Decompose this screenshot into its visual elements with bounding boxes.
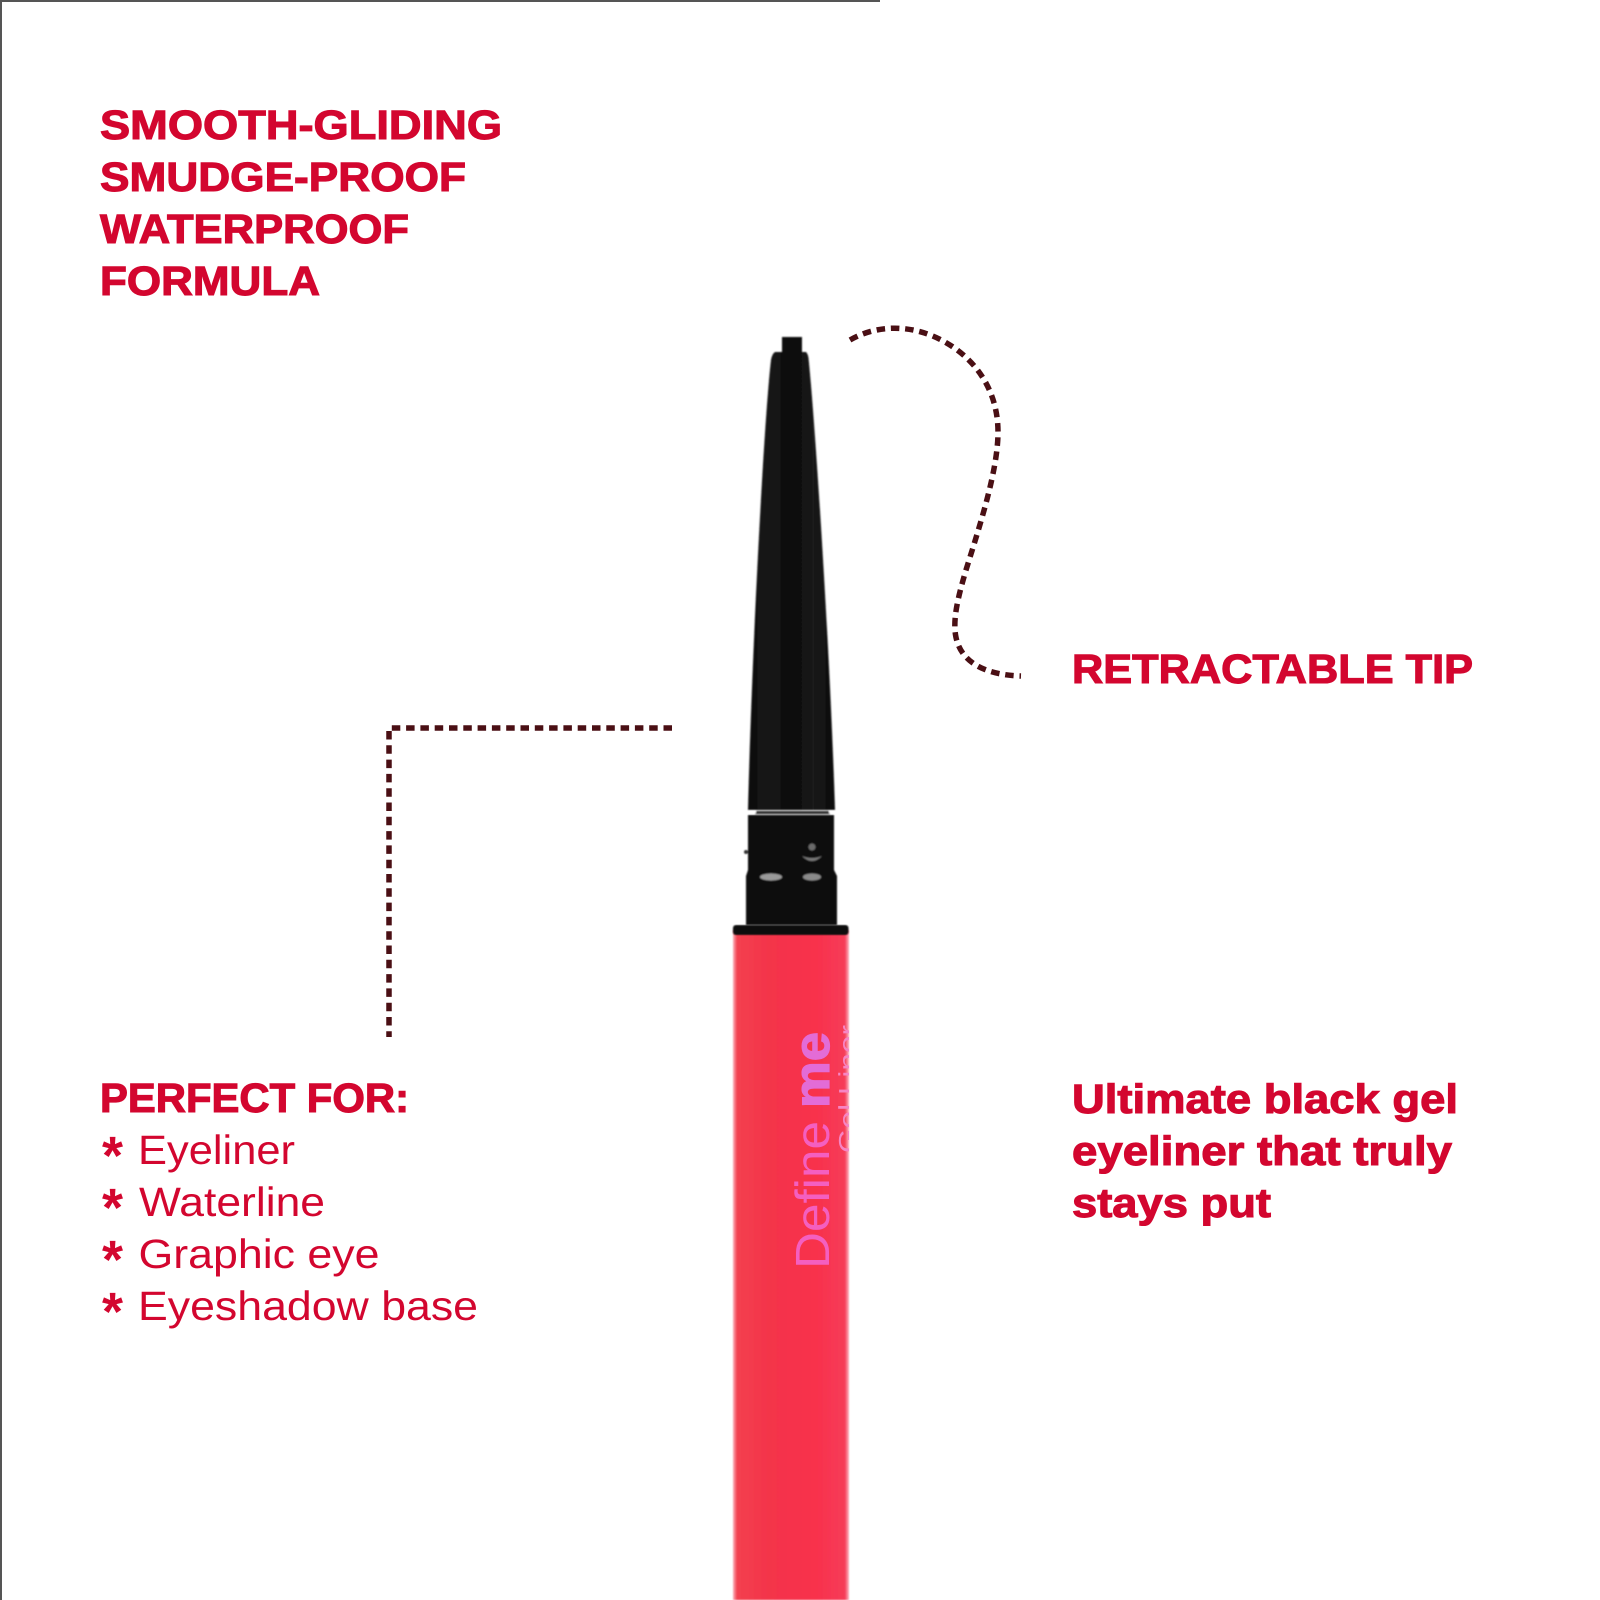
- list item: eyeliner: *: [102, 1126, 123, 1186]
- list item: eyeshadow base: *: [102, 1282, 123, 1342]
- product: eyeliner pen: [733, 337, 863, 1600]
- brand word: me: me: [784, 1032, 840, 1108]
- text block: perfect for list: [100, 1075, 478, 1342]
- list item: eyeliner: [102, 1126, 295, 1186]
- brand label: [794, 1026, 849, 1265]
- pen collar: [744, 811, 837, 925]
- list heading: PERFECT FOR:: [100, 1075, 409, 1121]
- heading: formula: [100, 102, 502, 304]
- frame edge lines: [1, 1, 880, 1600]
- list item: waterline: Waterline: [139, 1179, 325, 1225]
- list item: eyeshadow base: Eyeshadow base: [138, 1283, 478, 1329]
- dotted connector: elbow to perfect for: [389, 728, 672, 1037]
- heading: formula: FORMULA: [100, 258, 320, 304]
- callout: retractable tip: RETRACTABLE TIP: [1072, 646, 1473, 692]
- list item: eyeliner: Eyeliner: [138, 1127, 295, 1173]
- brand word: Define: Define: [787, 1121, 840, 1269]
- heading: formula: WATERPROOF: [100, 206, 409, 252]
- list item: waterline: *: [102, 1178, 123, 1238]
- list item: graphic eye: *: [102, 1230, 123, 1290]
- pen rim: [733, 925, 848, 935]
- list item: graphic eye: [102, 1230, 380, 1290]
- list item: graphic eye: Graphic eye: [138, 1231, 380, 1277]
- text block: ultimate black gel: stays put: [1072, 1180, 1271, 1226]
- list item: waterline: [102, 1178, 325, 1238]
- heading: formula: SMOOTH-GLIDING: [100, 102, 502, 148]
- text block: ultimate black gel: Ultimate black gel: [1072, 1076, 1458, 1122]
- heading: formula: SMUDGE-PROOF: [100, 154, 466, 200]
- text block: ultimate black gel: eyeliner that truly: [1072, 1128, 1452, 1174]
- list item: eyeshadow base: [102, 1282, 478, 1342]
- pen body: [733, 930, 849, 1600]
- dotted connector: curved to retractable tip: [850, 328, 1021, 676]
- product name: Gel Liner: [833, 1025, 863, 1153]
- text block: ultimate black gel: [1072, 1076, 1458, 1226]
- pen tip cone: [748, 337, 835, 810]
